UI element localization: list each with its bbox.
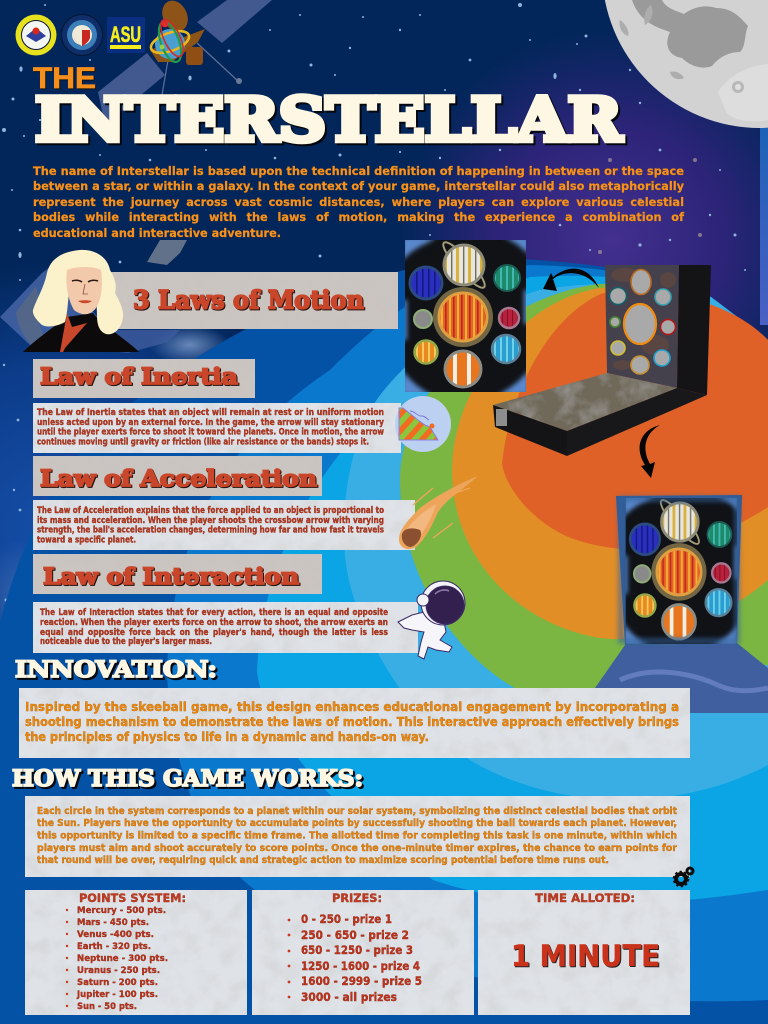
panel: points system: Earth - 320 pts. <box>77 942 151 952</box>
heading: innovation: INNOVATION: <box>15 657 217 683</box>
logo: ASU <box>107 17 145 53</box>
panel: law of acceleration text <box>33 500 415 550</box>
panel: prizes: 1250 - 1600 - prize 4 <box>301 959 420 973</box>
panel: how this game works: that round will be over, requiring quick and strategic action to maximize scoring potential before time runs out. <box>37 855 609 866</box>
panel: how this game works: the Sun. Players have the opportunity to accumulate points by successfully shooting the ball towards each planet. However, <box>37 818 677 829</box>
panel: points system: Mars - 450 pts. <box>77 918 149 928</box>
satellite <box>98 0 272 125</box>
intro paragraph: represent the journey across vast cosmic distances, where players can explore various celestial <box>33 195 684 209</box>
intro paragraph: The name of Interstellar is based upon the technical definition of happening in between or the space <box>33 164 684 178</box>
title: INTERSTELLAR: INTERSTELLAR <box>35 86 623 156</box>
panel: time alloted: TIME ALLOTED: <box>535 891 635 905</box>
panel: points system: Mercury - 500 pts. <box>77 906 166 916</box>
panel: law of acceleration text: toward a specific planet. <box>37 536 136 546</box>
lower faded satellite <box>0 240 187 353</box>
panel: law of inertia text <box>33 403 401 453</box>
heading: how this game works: HOW THIS GAME WORKS: <box>12 766 363 792</box>
panel: law of interaction text: reaction. When the player exerts force on the arrow to shoot, the arrow exerts an <box>40 618 388 628</box>
concentric planet rings <box>0 258 768 1024</box>
panel: time alloted <box>478 890 690 1015</box>
panel: law of interaction text: noticeable due to the player's larger mass. <box>40 637 212 647</box>
panel: how this game works: players must aim and shoot accurately to score points. Once the one-minute timer expires, the chance to earn points for <box>37 843 677 854</box>
panel: prizes: 1600 - 2999 - prize 5 <box>301 974 422 988</box>
panel: points system: Venus -400 pts. <box>77 930 154 940</box>
logo: college seal <box>62 14 102 56</box>
title <box>33 62 623 156</box>
panel: law of acceleration text: strength, the ball's acceleration changes, determining how far and how fast it travels <box>37 526 384 536</box>
panel: innovation <box>19 688 690 758</box>
panel: 3 laws heading: 3 Laws of Motion <box>133 286 364 314</box>
logo: ASU: ASU <box>110 22 141 47</box>
logo: atom <box>148 16 192 65</box>
panel: innovation: shooting mechanism to demonstrate the laws of motion. This interactive approach effectively brings <box>25 714 679 729</box>
panel: points system: Neptune - 300 pts. <box>77 954 168 964</box>
panel: how this game works: this opportunity is limited to a specific time frame. The allotted time for completing this task is one minute, within which <box>37 830 677 842</box>
photo: painted solar system board <box>402 237 529 395</box>
icon: astronaut <box>398 581 465 659</box>
panel: 3 laws heading <box>100 272 398 329</box>
panel: law of inertia heading: Law of Inertia <box>40 364 238 390</box>
intro paragraph: educational and interactive adventure. <box>33 226 281 240</box>
panel: how this game works: Each circle in the system corresponds to a planet within our solar system, symbolizing the distinct celestial bodies that orbit <box>37 806 677 817</box>
panel: law of inertia heading <box>33 359 255 398</box>
panel: law of inertia text: unless acted upon by an external force. In the game, the arrow will stay stationary <box>37 418 384 428</box>
panel: points system: Saturn - 200 pts. <box>77 978 158 988</box>
intro paragraph: between a star, or within a galaxy. In the context of your game, interstellar could also metaphorically <box>33 179 684 193</box>
icon: gears <box>674 868 693 886</box>
panel: prizes: 0 - 250 - prize 1 <box>301 912 392 926</box>
logo: university seal <box>16 14 56 56</box>
title: THE: THE <box>33 62 96 95</box>
icon: Isaac Newton portrait <box>23 250 139 352</box>
panel: points system: Jupiter - 100 pts. <box>76 990 158 1000</box>
panel: law of interaction text <box>33 602 418 653</box>
icon: inclined plane <box>395 396 451 452</box>
panel: innovation: Inspired by the skeeball game, this design enhances educational engagement by incorporating a <box>25 699 679 714</box>
logos row <box>16 14 192 65</box>
panel: law of acceleration heading <box>33 456 322 496</box>
panel: law of inertia text: continues moving until gravity or friction (like air resistance or the bands) stops it. <box>37 438 369 448</box>
panel: prizes: 650 - 1250 - prize 3 <box>301 943 413 957</box>
panel: prizes: PRIZES: <box>332 891 382 905</box>
panel: how this game works <box>25 796 690 877</box>
intro paragraph: bodies while interacting with the laws of motion, making the experience a combination of <box>33 210 685 224</box>
panel: law of interaction text: The Law of Interaction states that for every action, there is an equal and opposite <box>40 608 388 618</box>
panel: law of inertia text: until the player exerts force to shoot it toward the planets. Once in motion, the arrow <box>37 428 384 438</box>
arrow: board to photo <box>543 269 599 291</box>
photo: finished game board <box>595 495 768 713</box>
moon <box>602 0 768 128</box>
panel: points system <box>25 890 247 1015</box>
icon: meteor <box>399 476 478 549</box>
panel: prizes: 3000 - all prizes <box>301 990 397 1004</box>
panel: innovation: the principles of physics to life in a dynamic and hands-on way. <box>25 729 429 744</box>
intro paragraph <box>33 164 685 240</box>
panel: points system: Sun - 50 pts. <box>77 1002 137 1012</box>
panel: points system: Uranus - 250 pts. <box>77 966 160 976</box>
arrow: board down to painted board <box>640 425 660 478</box>
panel: law of interaction text: equal and opposite force back on the player's hand, though the latter is less <box>40 628 388 638</box>
panel: prizes: 250 - 650 - prize 2 <box>301 928 409 942</box>
panel: time alloted: 1 MINUTE <box>511 939 660 973</box>
panel: law of interaction heading <box>33 554 322 594</box>
panel: law of acceleration heading: Law of Acceleration <box>40 466 317 492</box>
panel: prizes <box>252 890 474 1015</box>
panel: law of acceleration text: The Law of Acceleration explains that the force applied to an object is proportional to <box>37 506 384 516</box>
panel: points system: POINTS SYSTEM: <box>79 891 186 905</box>
game board 3D render <box>493 265 711 456</box>
panel: law of interaction heading: Law of Interaction <box>43 564 299 590</box>
panel: law of inertia text: The Law of Inertia states that an object will remain at rest or in uniform motion <box>37 408 384 418</box>
panel: law of acceleration text: its mass and acceleration. When the player shoots the crossbow arrow with varying <box>37 516 384 526</box>
